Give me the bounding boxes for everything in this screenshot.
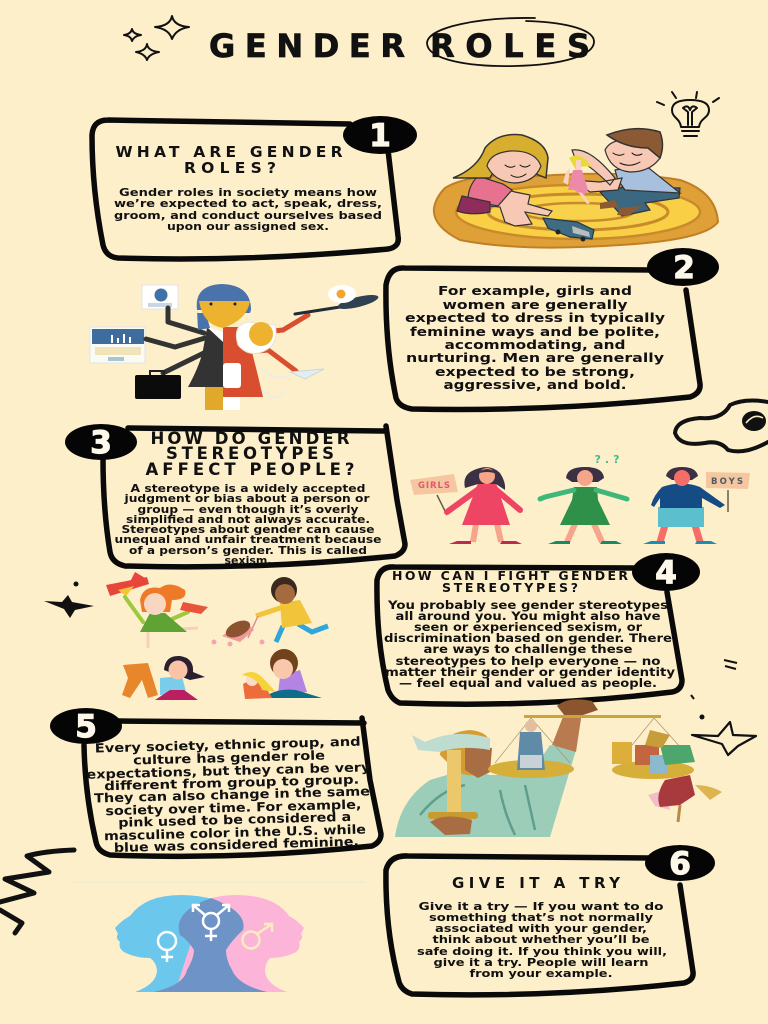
title	[209, 18, 594, 66]
body text	[86, 733, 372, 856]
raised arm	[552, 709, 582, 752]
body text: upon our assigned sex.	[167, 220, 329, 233]
title: ROLES	[430, 27, 590, 65]
number badge 6	[645, 845, 715, 882]
body text: different from group to group.	[104, 772, 359, 793]
body text: seen or experienced sexism, or	[414, 620, 642, 634]
number badge 2: 2	[673, 250, 695, 286]
heading	[146, 429, 354, 479]
left scale pan with man in suit	[488, 720, 574, 778]
body text: pink used to be considered a	[118, 809, 351, 830]
body text: discrimination based on gender. There	[384, 631, 672, 645]
panel: example text	[386, 248, 719, 410]
body text: matter their gender or gender identity	[385, 665, 676, 679]
panel: give it a try	[386, 845, 715, 995]
body text: unequal and unfair treatment because	[114, 533, 382, 546]
body text: sexism.	[224, 554, 272, 567]
head and blindfold	[440, 730, 490, 776]
body text: A stereotype is a widely accepted	[130, 482, 366, 495]
heading: HOW DO GENDER	[150, 429, 350, 448]
body text: all around you. You might also have	[396, 609, 661, 623]
icon: star and dots right	[691, 660, 756, 755]
body text: For example, girls and	[438, 284, 632, 299]
scale beam	[524, 715, 661, 718]
heading	[392, 568, 628, 595]
icon: small star left	[44, 582, 94, 618]
body text: masculine color in the U.S. while	[104, 821, 366, 843]
body text: of a person’s gender. This is called	[129, 544, 367, 557]
symbols	[158, 905, 272, 962]
boy with doll	[242, 649, 322, 699]
robe	[395, 745, 576, 837]
body text: culture has gender role	[133, 748, 325, 768]
panel: what are gender roles	[92, 116, 417, 259]
boy with stroller	[212, 577, 328, 646]
boy with sign: BOYS	[711, 477, 743, 487]
body text	[114, 186, 382, 233]
arms	[146, 308, 308, 373]
girl with airplane and rocket	[106, 572, 208, 648]
body text: Stereotypes about gender can cause	[122, 523, 374, 536]
body text: Gender roles in society means how	[119, 186, 377, 199]
body text: expectations, but they can be very	[86, 759, 371, 782]
laptop report	[90, 327, 145, 363]
blue head	[115, 895, 245, 992]
heading: WHAT ARE GENDER	[116, 143, 343, 161]
body text: group — even though it’s overly	[138, 503, 358, 516]
overlap	[154, 898, 267, 992]
woman body	[188, 284, 263, 410]
icon: light bulb	[657, 92, 719, 136]
body text: we’re expected to act, speak, dress,	[114, 197, 382, 210]
illustration: lady justice with scales	[395, 699, 722, 837]
number badge 6: 6	[669, 846, 691, 882]
body text: think about whether you’ll be	[432, 933, 650, 946]
number badge 2	[647, 248, 719, 286]
divider line	[72, 881, 365, 883]
number badge 4	[632, 553, 700, 591]
panel: how can I fight gender stereotypes	[377, 553, 700, 704]
illustration: overlapping heads with gender symbols	[115, 895, 304, 992]
body text: Every society, ethnic group, and	[95, 734, 361, 756]
body text: give it a try. People will learn	[434, 956, 648, 969]
body text: They can also change in the same	[94, 783, 370, 806]
body text	[114, 482, 382, 567]
number badge 4: 4	[655, 555, 677, 591]
number badge 5	[50, 708, 122, 745]
body text: — feel equal and valued as people.	[399, 676, 657, 690]
number badge 1	[343, 116, 417, 154]
body text	[384, 598, 676, 690]
body text: expected to be strong,	[435, 365, 635, 380]
pink head	[175, 895, 304, 992]
toy truck	[543, 218, 594, 242]
boy with sign	[643, 467, 750, 544]
heading: GIVE IT A TRY	[452, 874, 621, 892]
chart document	[142, 285, 178, 309]
body text: nurturing. Men are generally	[406, 351, 665, 366]
heading: AFFECT PEOPLE?	[146, 460, 354, 479]
body text: women are generally	[442, 298, 628, 313]
number badge 3: 3	[90, 425, 112, 461]
illustration: three children with signs	[410, 453, 750, 544]
body text: judgment or bias about a person or	[123, 492, 370, 505]
sword	[447, 750, 461, 822]
body text: safe doing it. If you think you will,	[417, 945, 667, 958]
body text	[405, 284, 666, 393]
illustration: four children playing with toys	[106, 572, 328, 700]
body text: from your example.	[470, 967, 612, 980]
iron	[262, 368, 324, 398]
body text: something that’s not normally	[429, 911, 653, 924]
illustration: children playing on rug	[434, 129, 718, 248]
heading: STEREOTYPES?	[442, 580, 578, 595]
pan and egg	[295, 285, 380, 314]
icon: scribble splat	[675, 401, 768, 451]
body text: simplified and not always accurate.	[126, 513, 370, 526]
heading	[116, 143, 343, 177]
body text: groom, and conduct ourselves based	[114, 209, 382, 222]
body text: are ways to challenge these	[424, 642, 633, 656]
body text: accommodating, and	[444, 338, 626, 353]
body text: blue was considered feminine.	[114, 834, 359, 855]
body text: expected to dress in typically	[405, 311, 666, 326]
body text: feminine ways and be polite,	[410, 325, 660, 340]
title: GENDER	[209, 27, 405, 65]
number badge 3	[65, 424, 137, 461]
right scale pan with household goods	[612, 730, 695, 779]
briefcase	[135, 371, 181, 399]
body text: Give it a try — If you want to do	[418, 900, 664, 913]
number badge 1: 1	[369, 118, 391, 154]
panel: cultural expectations	[50, 708, 381, 856]
baby	[236, 322, 276, 353]
child with question marks: ?.?	[594, 453, 620, 466]
body text: stereotypes to help everyone — no	[396, 654, 661, 668]
girl	[453, 135, 552, 226]
body text: associated with your gender,	[435, 922, 647, 935]
illustration: woman balancing work and home	[90, 284, 380, 410]
falling woman	[648, 775, 722, 822]
boy	[572, 129, 680, 216]
girl with sign: GIRLS	[418, 481, 450, 491]
heading: STEREOTYPES	[166, 444, 334, 463]
body text	[417, 900, 667, 980]
body text: society over time. For example,	[105, 797, 362, 818]
child with question marks	[540, 453, 627, 544]
number badge 5: 5	[75, 709, 97, 745]
icon: sparkles	[124, 16, 189, 60]
doll	[563, 155, 592, 204]
heading: ROLES?	[184, 159, 276, 177]
girl with sign	[410, 467, 522, 544]
heading: HOW CAN I FIGHT GENDER	[392, 568, 628, 583]
girl with robot	[122, 656, 205, 700]
icon: squiggle	[0, 850, 74, 933]
body text: You probably see gender stereotypes	[387, 598, 668, 612]
panel: how do gender stereotypes affect people	[65, 424, 405, 567]
body text: aggressive, and bold.	[444, 378, 626, 393]
